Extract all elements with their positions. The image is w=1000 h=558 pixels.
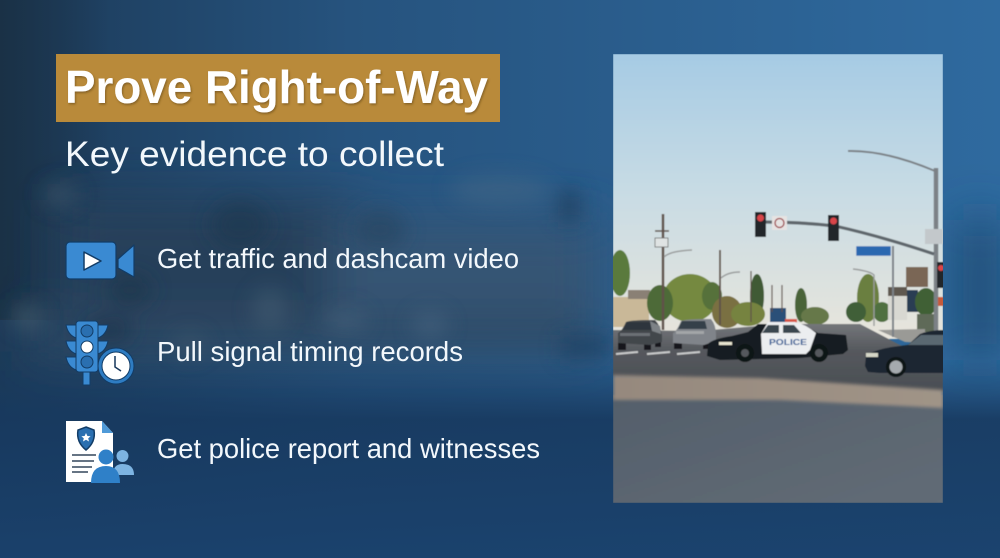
subtitle: Key evidence to collect [65,134,444,174]
signal heads [755,212,944,306]
foreground asphalt [613,395,943,503]
icon: traffic light and clock [66,321,134,385]
utility poles [655,214,782,330]
evidence item: police report [66,421,540,483]
label: video: Get traffic and dashcam video [157,243,519,274]
label: signal timing: Pull signal timing records [157,336,463,367]
dark sedan right [865,330,944,377]
street and roadside signs [856,246,891,256]
police car [707,319,848,362]
street light and pole [848,151,936,337]
trees and buildings [610,250,937,332]
road [613,324,943,392]
evidence item: video [66,242,519,279]
icon: video camera [66,242,134,279]
sunlit kerb band [613,375,943,408]
police car: POLICE [769,337,807,347]
mast arm [765,222,934,254]
icon: report and witnesses [66,421,134,483]
crosswalk marks [616,352,700,354]
photo: intersection with police car [610,54,944,503]
evidence item: signal timing [66,321,463,385]
title banner: Prove Right-of-Way [65,61,488,113]
parked suv left [618,320,662,350]
sky [613,54,943,339]
parked suv centre [673,319,716,349]
label: police report: Get police report and witnesses [157,433,540,464]
